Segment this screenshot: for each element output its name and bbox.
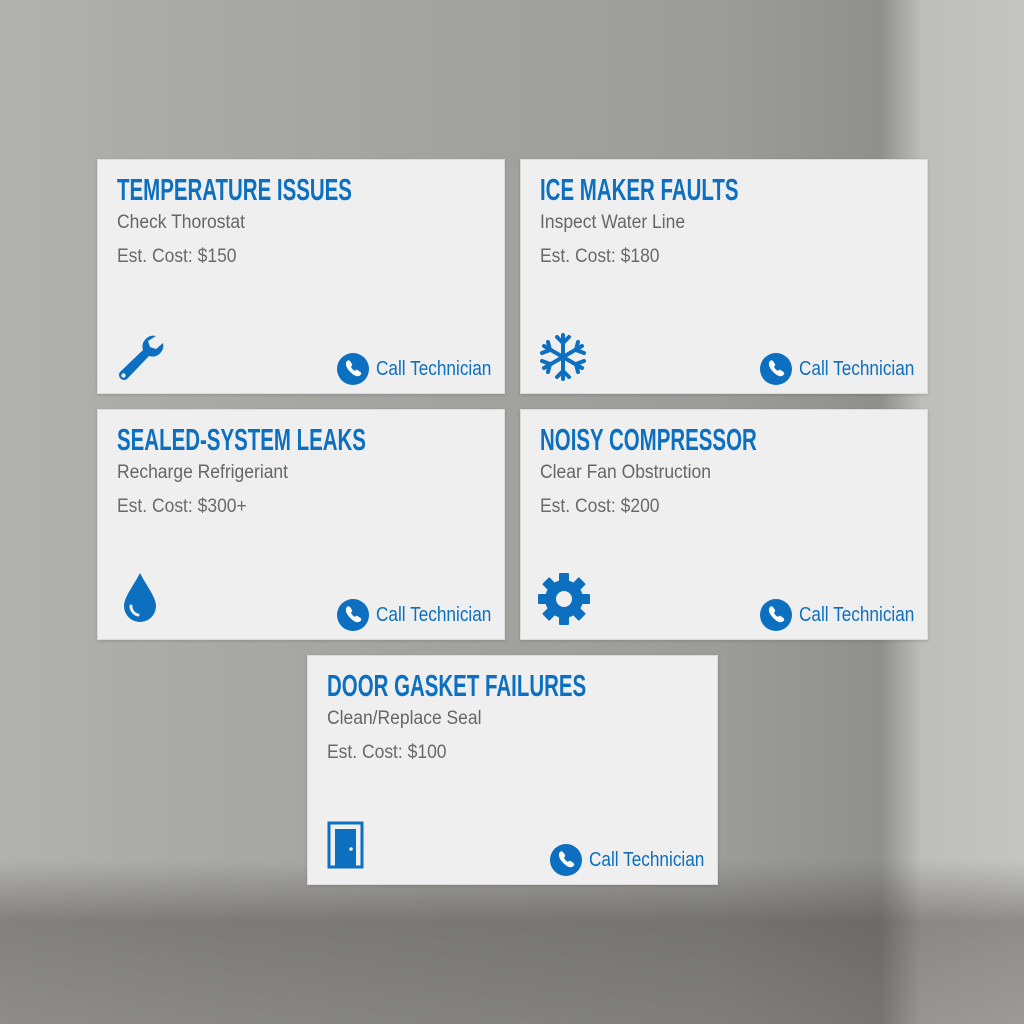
call technician button [760,353,914,385]
action text: Clear Fan Obstruction [540,462,711,483]
cost text: Est. Cost: $150 [117,246,237,267]
call technician button: Call Technician [376,358,491,380]
card: noisy compressor [520,409,928,640]
icon: gear [538,573,590,625]
action text: Clean/Replace Seal [327,708,482,729]
call technician button [337,599,491,631]
call technician button [760,599,914,631]
card: ice maker faults [520,159,928,394]
action text: Check Thorostat [117,212,245,233]
card: door gasket failures [307,655,718,885]
cost text: Est. Cost: $100 [327,742,447,763]
heading: SEALED-SYSTEM LEAKS [117,422,366,457]
call technician button [337,353,491,385]
heading: TEMPERATURE ISSUES [117,172,352,207]
heading: NOISY COMPRESSOR [540,422,757,457]
action text: Inspect Water Line [540,212,685,233]
icon: water drop [124,573,156,622]
action text: Recharge Refrigeriant [117,462,288,483]
call technician button [550,844,704,876]
heading: DOOR GASKET FAILURES [327,668,586,703]
call technician button: Call Technician [589,848,704,870]
cost text: Est. Cost: $300+ [117,496,247,517]
icon: wrench [119,336,164,380]
call technician button: Call Technician [799,604,914,626]
cost text: Est. Cost: $200 [540,496,660,517]
cost text: Est. Cost: $180 [540,246,660,267]
card: sealed-system leaks [97,409,505,640]
heading: ICE MAKER FAULTS [540,172,739,207]
card: temperature issues [97,159,505,394]
icon: door [328,822,364,868]
call technician button: Call Technician [799,358,914,380]
icon: snowflake [540,333,586,381]
call technician button: Call Technician [376,604,491,626]
